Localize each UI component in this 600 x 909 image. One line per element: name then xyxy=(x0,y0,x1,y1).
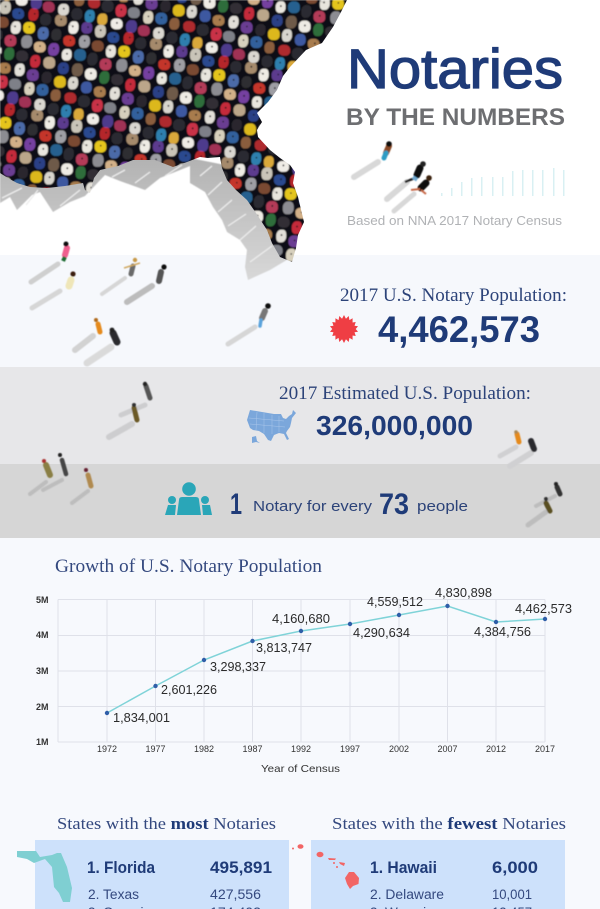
line chart: 1997 xyxy=(340,744,360,754)
people: notary band xyxy=(31,242,271,363)
icon: red burst xyxy=(330,315,358,343)
line chart: 2M xyxy=(36,702,49,712)
ratio statement: 1 xyxy=(230,488,242,521)
chart heading: Growth of U.S. Notary Population xyxy=(55,556,323,577)
panel: fewest notaries: 1. Hawaii xyxy=(370,858,437,877)
band: notary population xyxy=(0,255,600,367)
line chart: 3,813,747 xyxy=(256,641,312,655)
band: ratio xyxy=(0,464,600,538)
line chart: 4,462,573 xyxy=(515,602,572,616)
line chart: 4,290,634 xyxy=(353,626,410,640)
faint bar motif xyxy=(441,168,564,196)
line chart: Year of Census xyxy=(261,763,340,775)
line chart: 2007 xyxy=(437,744,458,754)
line chart: 3,298,337 xyxy=(210,660,266,674)
line chart: 1982 xyxy=(194,744,214,754)
ratio statement xyxy=(230,488,468,521)
line chart: 4,384,756 xyxy=(474,625,531,639)
line chart: 1987 xyxy=(242,744,263,754)
line chart: 2,601,226 xyxy=(161,683,217,697)
label: us population: 2017 Estimated U.S. Population: xyxy=(279,383,531,404)
crowd shadow xyxy=(0,150,290,280)
panel: most notaries: 427,556 xyxy=(210,887,261,902)
panel: most notaries: 1. Florida xyxy=(87,858,155,877)
line chart: 1,834,001 xyxy=(113,711,170,725)
line chart: 3M xyxy=(36,666,49,676)
icon: group of people xyxy=(165,482,212,515)
line chart: 5M xyxy=(36,595,49,605)
line chart xyxy=(36,586,572,775)
icon: us map xyxy=(247,410,296,443)
panel: fewest notaries: 2. Delaware xyxy=(370,887,444,902)
line chart: 4M xyxy=(36,630,49,640)
line chart: 4,160,680 xyxy=(272,612,330,626)
panel: fewest notaries xyxy=(292,840,565,909)
header background xyxy=(0,0,600,255)
label: notary population: 2017 U.S. Notary Population: xyxy=(340,285,567,306)
walking people near title xyxy=(354,141,432,211)
ratio statement: Notary for every xyxy=(253,498,373,515)
line chart: 2002 xyxy=(389,744,409,754)
panel: most notaries: 2. Texas xyxy=(88,887,139,902)
subtitle: BY THE NUMBERS xyxy=(346,104,565,131)
ratio statement: people xyxy=(417,498,468,515)
panel: most notaries xyxy=(17,840,289,909)
line chart: 2017 xyxy=(535,744,555,754)
icon: hawaii xyxy=(292,844,359,889)
figure: notary population: 4,462,573 xyxy=(378,309,540,350)
line chart: 4,830,898 xyxy=(435,586,492,600)
crowd of people forming a map shape xyxy=(0,0,350,265)
people: ratio band xyxy=(30,453,560,525)
panel: fewest notaries: 10,001 xyxy=(492,887,532,902)
line chart: 2012 xyxy=(486,744,506,754)
line chart: 1977 xyxy=(145,744,166,754)
people: population band xyxy=(109,382,534,466)
band: us population xyxy=(0,367,600,464)
icon: florida xyxy=(17,851,72,902)
panel: most notaries: 495,891 xyxy=(210,858,272,877)
heading: fewest notaries: States with the fewest Notaries xyxy=(332,814,566,833)
source note: Based on NNA 2017 Notary Census xyxy=(347,213,563,228)
line chart: 4,559,512 xyxy=(367,595,423,609)
line chart: 1M xyxy=(36,737,49,747)
ratio statement: 73 xyxy=(379,488,409,521)
figure: us population: 326,000,000 xyxy=(316,410,473,441)
line chart: 1972 xyxy=(97,744,117,754)
title: Notaries xyxy=(347,37,563,100)
line chart: 1992 xyxy=(291,744,311,754)
heading: most notaries: States with the most Notaries xyxy=(57,814,276,833)
panel: fewest notaries: 6,000 xyxy=(492,858,538,877)
